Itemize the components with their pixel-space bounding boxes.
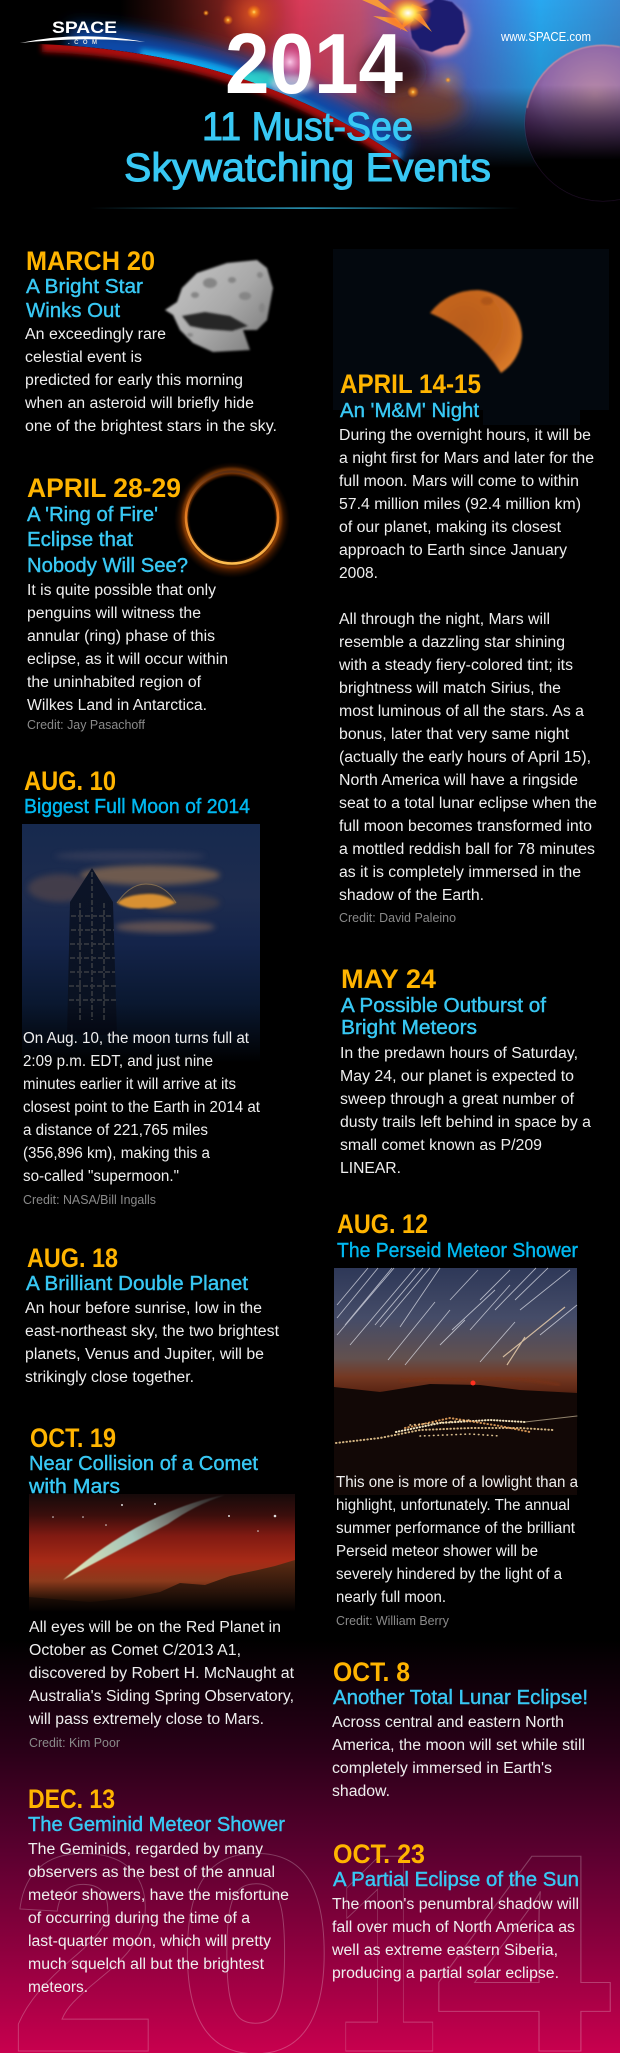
date: AUG. 10 [24, 766, 116, 796]
body text: the uninhabited region of [27, 674, 202, 691]
title: subtitle: Skywatching Events [124, 146, 491, 190]
image: asteroid [165, 260, 273, 352]
image: supermoon behind monument [22, 824, 260, 1064]
body text: Across central and eastern North [332, 1714, 564, 1731]
body text: celestial event is [25, 349, 142, 366]
heading: A Brilliant Double Planet [26, 1273, 248, 1295]
orange sparkles [203, 5, 468, 100]
body text: 2:09 p.m. EDT, and just nine [23, 1053, 213, 1070]
title: subtitle: 11 Must-See [202, 105, 413, 149]
body text: so-called "supermoon." [23, 1168, 179, 1185]
header space art [38, 0, 620, 202]
body text: of our planet, making its closest [339, 519, 562, 536]
watermark: outlined 2014 [9, 1795, 614, 2053]
body text: An exceedingly rare [25, 326, 166, 343]
body text: penguins will witness the [27, 605, 201, 622]
body text: meteor showers, have the misfortune [28, 1887, 289, 1904]
body text [340, 1045, 591, 1177]
panel: Oct. 19 [28, 1423, 295, 1750]
image: comet over Mars [29, 1494, 295, 1612]
body text [331, 1896, 579, 1982]
panel: April 28-29 [27, 462, 290, 732]
body text: October as Comet C/2013 A1, [29, 1642, 241, 1659]
heading [341, 995, 546, 1039]
date: AUG. 12 [337, 1209, 428, 1239]
body text: Wilkes Land in Antarctica. [27, 697, 207, 714]
date: OCT. 19 [30, 1423, 116, 1453]
heading: Eclipse that [27, 529, 133, 551]
heading: Bright Meteors [341, 1017, 477, 1039]
body text: shadow of the Earth. [339, 887, 484, 904]
body text: summer performance of the brilliant [336, 1520, 576, 1537]
body text: will pass extremely close to Mars. [28, 1711, 264, 1728]
body text [25, 1300, 280, 1386]
body text: fall over much of North America as [332, 1919, 575, 1936]
body text: nearly full moon. [336, 1589, 446, 1606]
body text: dusty trails left behind in space by a [340, 1114, 591, 1131]
body text: highlight, unfortunately. The annual [336, 1497, 570, 1514]
heading: Biggest Full Moon of 2014 [24, 796, 250, 818]
image: eclipsed moon [333, 249, 609, 425]
body text: shadow. [332, 1783, 390, 1800]
body text [24, 326, 277, 435]
body text: last-quarter moon, which will pretty [28, 1933, 271, 1950]
asteroid with pink halo [362, 0, 469, 56]
body text: 2008. [339, 565, 378, 582]
body text: resemble a dazzling star shining [339, 634, 565, 651]
heading: Another Total Lunar Eclipse! [333, 1687, 588, 1709]
limb blue glow [70, 36, 400, 158]
panel: April 14-15 [333, 249, 609, 925]
body text [336, 1474, 578, 1606]
body text: of occurring during the time of a [28, 1910, 250, 1927]
body text: On Aug. 10, the moon turns full at [23, 1030, 250, 1047]
panel: Oct. 8 [332, 1657, 588, 1800]
title: year: 2014 [225, 17, 403, 112]
credit: Credit: Kim Poor [29, 1736, 120, 1750]
body text: (actually the early hours of April 15), [339, 749, 591, 766]
body text: one of the brightest stars in the sky. [25, 418, 277, 435]
body text [27, 582, 228, 714]
heading: A Possible Outburst of [341, 995, 546, 1017]
body text: full moon. Mars will come to within [339, 473, 579, 490]
body text: 57.4 million miles (92.4 million km) [339, 496, 581, 513]
panel: Oct. 23 [331, 1839, 579, 1982]
body text: as it is completely immersed in the [339, 864, 581, 881]
body text [338, 427, 597, 904]
right planet [525, 45, 620, 201]
body text: predicted for early this morning [25, 372, 243, 389]
body text: seat to a total lunar eclipse when the [339, 795, 597, 812]
body text: well as extreme eastern Siberia, [331, 1942, 558, 1959]
body text [28, 1841, 289, 1996]
date: MAY 24 [341, 964, 436, 994]
body text: All eyes will be on the Red Planet in [29, 1619, 281, 1636]
panel: Aug. 12 [334, 1209, 578, 1628]
heading: Nobody Will See? [27, 555, 188, 577]
body text: Australia's Siding Spring Observatory, [29, 1688, 294, 1705]
date: APRIL 14-15 [340, 369, 481, 399]
body text [28, 1619, 295, 1728]
logo: SPACE.com [20, 18, 145, 46]
body text: The Geminids, regarded by many [28, 1841, 263, 1858]
left planet dark body and red limb [0, 44, 470, 215]
heading: An 'M&M' Night [340, 400, 479, 422]
body text: annular (ring) phase of this [27, 628, 215, 645]
image: annular eclipse [174, 462, 290, 578]
body text: Perseid meteor shower will be [336, 1543, 538, 1560]
body text: when an asteroid will briefly hide [24, 395, 254, 412]
panel: Aug. 10 [22, 766, 261, 1207]
body text: All through the night, Mars will [339, 611, 550, 628]
heading: The Geminid Meteor Shower [28, 1814, 285, 1836]
divider [90, 208, 520, 209]
body text [23, 1030, 261, 1185]
date: OCT. 8 [333, 1657, 410, 1687]
date: AUG. 18 [27, 1243, 118, 1273]
body text [332, 1714, 585, 1800]
body text: much squelch all but the brightest [28, 1956, 265, 1973]
body text: The moon's penumbral shadow will [332, 1896, 579, 1913]
body text: brightness will match Sirius, the [339, 680, 561, 697]
body text: It is quite possible that only [27, 582, 216, 599]
body text: This one is more of a lowlight than a [336, 1474, 578, 1491]
title: subtitle [124, 105, 491, 190]
body text: planets, Venus and Jupiter, will be [25, 1346, 264, 1363]
body text: a distance of 221,765 miles [23, 1122, 208, 1139]
panel: May 24 [340, 964, 591, 1177]
date: MARCH 20 [26, 246, 155, 276]
credit: Credit: Jay Pasachoff [27, 718, 146, 732]
body text: observers as the best of the annual [28, 1864, 275, 1881]
credit: Credit: NASA/Bill Ingalls [23, 1193, 156, 1207]
body text: small comet known as P/209 [340, 1137, 542, 1154]
body text: with a steady fiery-colored tint; its [338, 657, 573, 674]
heading: A Partial Eclipse of the Sun [333, 1869, 579, 1891]
body text: producing a partial solar eclipse. [332, 1965, 559, 1982]
body text: sweep through a great number of [340, 1091, 575, 1108]
body text: eclipse, as it will occur within [27, 651, 228, 668]
heading: with Mars [28, 1476, 120, 1498]
body text: May 24, our planet is expected to [340, 1068, 574, 1085]
body text: minutes earlier it will arrive at its [23, 1076, 236, 1093]
heading: A Bright Star [26, 276, 143, 298]
heading [28, 1453, 258, 1498]
body text: completely immersed in Earth's [332, 1760, 552, 1777]
date: APRIL 28-29 [27, 473, 181, 503]
logo: SPACE.com: .COM [68, 40, 97, 46]
body text: During the overnight hours, it will be [339, 427, 591, 444]
body text: east-northeast sky, the two brightest [25, 1323, 280, 1340]
body text: closest point to the Earth in 2014 at [23, 1099, 261, 1116]
body text: bonus, later that very same night [339, 726, 570, 743]
body text: severely hindered by the light of a [336, 1566, 562, 1583]
logo: SPACE.com: SPACE [52, 18, 117, 37]
credit: Credit: William Berry [336, 1614, 450, 1628]
credit: Credit: David Paleino [339, 911, 456, 925]
panel: March 20 [24, 246, 277, 435]
body text: strikingly close together. [25, 1369, 194, 1386]
body text: approach to Earth since January [339, 542, 567, 559]
warm glow behind sparkles [219, 0, 287, 48]
body text: full moon becomes transformed into [339, 818, 592, 835]
dark brown patch near year [363, 46, 427, 98]
body text: In the predawn hours of Saturday, [340, 1045, 578, 1062]
body text: meteors. [28, 1979, 88, 1996]
body text: America, the moon will set while still [332, 1737, 585, 1754]
heading: A 'Ring of Fire' [27, 504, 158, 526]
heading: Winks Out [26, 300, 120, 322]
body text: An hour before sunrise, low in the [25, 1300, 262, 1317]
panel: Aug. 18 [25, 1243, 280, 1386]
body text: LINEAR. [340, 1160, 401, 1177]
date: DEC. 13 [28, 1784, 115, 1814]
body text: a night first for Mars and later for the [339, 450, 594, 467]
heading [26, 276, 143, 322]
body text: (356,896 km), making this a [23, 1145, 210, 1162]
body text: a mottled reddish ball for 78 minutes [339, 841, 595, 858]
body text: North America will have a ringside [339, 772, 578, 789]
heading: The Perseid Meteor Shower [337, 1240, 578, 1262]
body text: most luminous of all the stars. As a [339, 703, 584, 720]
website url: www.SPACE.com [500, 30, 591, 44]
heading: Near Collision of a Comet [29, 1453, 258, 1475]
panel: Dec. 13 [28, 1784, 289, 1996]
nebula sky [128, 0, 620, 164]
body text: discovered by Robert H. McNaught at [29, 1665, 295, 1682]
orange haze [385, 83, 465, 127]
date: OCT. 23 [333, 1839, 425, 1869]
image: star trails over town [334, 1268, 577, 1495]
heading [27, 504, 188, 577]
